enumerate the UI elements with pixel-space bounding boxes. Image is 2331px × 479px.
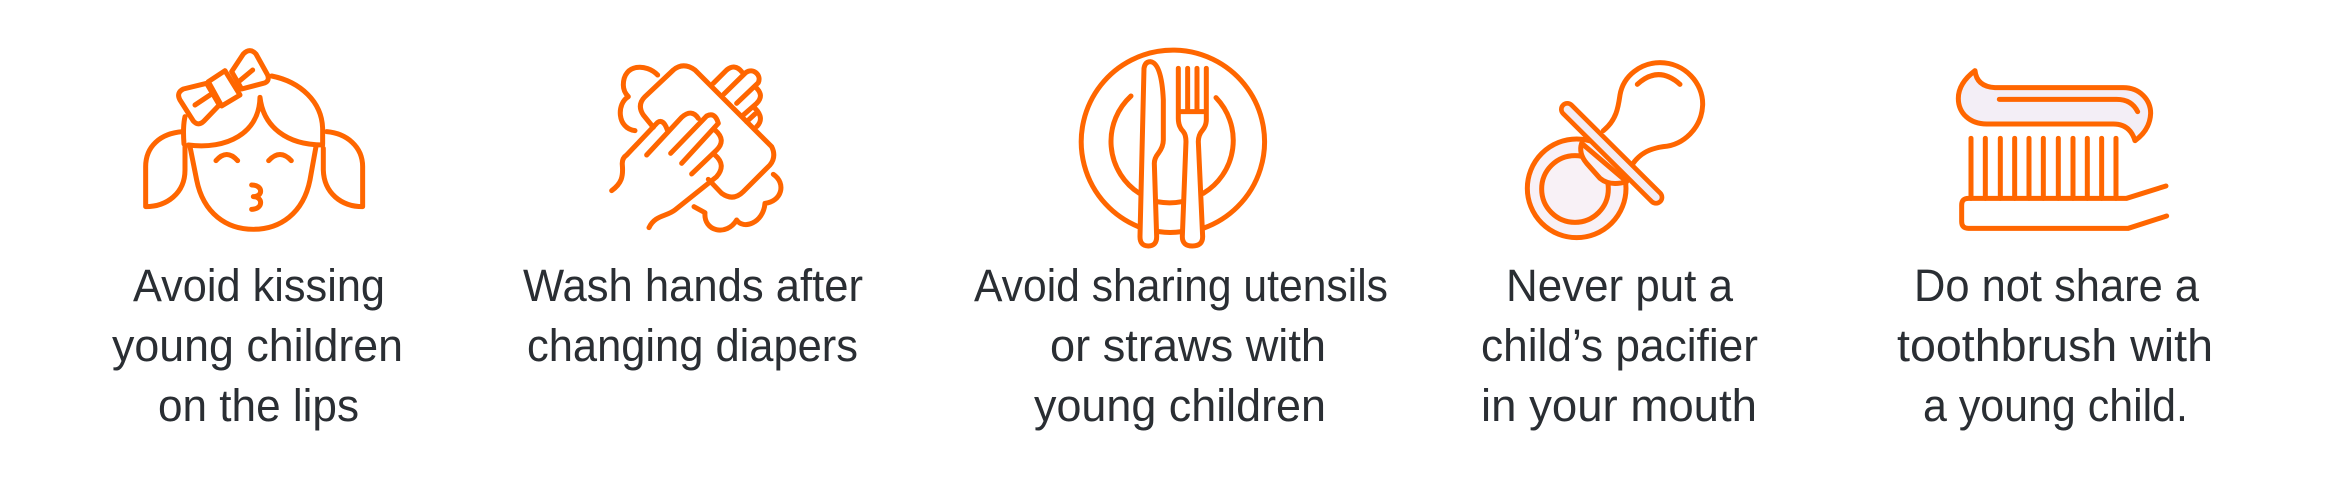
text: avoid sharing utensils (974, 260, 1388, 431)
text: pacifier: in your mouth (1481, 380, 1757, 431)
text: wash hands: Wash hands after (523, 260, 863, 311)
text: toothbrush (1897, 260, 2213, 431)
text: toothbrush: toothbrush with (1897, 320, 2213, 371)
text: avoid kissing: on the lips (158, 380, 359, 431)
text: wash hands: changing diapers (527, 320, 858, 371)
icon: plate with knife and fork (1081, 50, 1265, 246)
text: toothbrush: a young child. (1923, 380, 2188, 431)
text: pacifier: child’s pacifier (1481, 320, 1758, 371)
icon: girl blowing a kiss (146, 51, 363, 229)
text: avoid sharing utensils: young children (1034, 380, 1326, 431)
text: pacifier (1481, 260, 1758, 431)
icon: pacifier (1527, 63, 1703, 238)
text: avoid kissing (112, 260, 403, 431)
text: pacifier: Never put a (1506, 260, 1734, 311)
text: avoid sharing utensils: Avoid sharing utensils (974, 260, 1388, 311)
text: avoid kissing: Avoid kissing (133, 260, 385, 311)
text: wash hands (523, 260, 863, 371)
text: toothbrush: Do not share a (1914, 260, 2200, 311)
text: avoid kissing: young children (112, 320, 403, 371)
icon: toothbrush with toothpaste (1958, 71, 2167, 228)
text: avoid sharing utensils: or straws with (1050, 320, 1326, 371)
icon: washing hands with soap (612, 66, 781, 230)
